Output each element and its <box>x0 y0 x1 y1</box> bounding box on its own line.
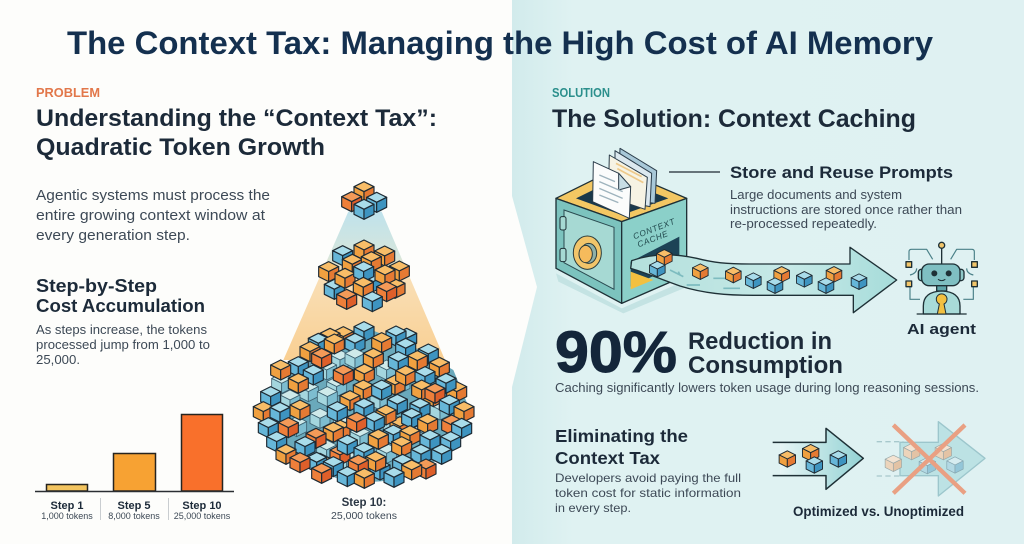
subheading description: 25,000. <box>36 353 80 367</box>
bar label: step 1 <box>41 500 93 521</box>
callout: store and reuse prompts: re-processed repeatedly. <box>730 217 877 231</box>
pile caption: 25,000 tokens <box>331 510 397 522</box>
safe left face <box>556 198 622 303</box>
subheading: step-by-step <box>36 275 205 316</box>
title: The Context Tax: Managing the High Cost of AI Memory <box>67 25 933 61</box>
subheading description: As steps increase, the tokens <box>36 323 207 337</box>
problem heading <box>36 105 437 161</box>
solution tag: SOLUTION <box>552 86 610 100</box>
bar chart <box>35 414 234 521</box>
flow cubes <box>650 250 867 293</box>
safe top <box>556 168 687 222</box>
cube group: step 5 <box>319 240 409 312</box>
problem tag: PROBLEM <box>36 85 100 100</box>
comparison: optimized vs unoptimized <box>773 422 985 496</box>
block: eliminating the context tax: token cost for static information <box>555 486 741 500</box>
panel: solution <box>552 86 985 519</box>
pile caption <box>331 497 397 522</box>
cube group: step 10 <box>253 322 474 488</box>
bar label: step 5: 8,000 tokens <box>108 511 160 521</box>
stat: 90% reduction: Consumption <box>688 352 843 379</box>
bar label: step 10 <box>174 500 231 521</box>
light cone <box>283 212 445 360</box>
flow small arrows <box>670 270 740 288</box>
safe shadow <box>556 273 692 313</box>
problem heading: Understanding the “Context Tax”: <box>36 105 437 132</box>
callout: store and reuse prompts: instructions are stored once rather than <box>730 203 962 217</box>
subheading: step-by-step: Step-by-Step <box>36 275 157 296</box>
callout line <box>669 171 720 173</box>
solution heading: The Solution: Context Caching <box>552 105 916 133</box>
pile caption: Step 10: <box>342 497 386 509</box>
bar label: step 1: Step 1 <box>50 500 84 512</box>
subheading: step-by-step: Cost Accumulation <box>36 295 205 316</box>
bar label: step 10: Step 10 <box>182 500 222 512</box>
icon: robot <box>906 242 977 314</box>
bar label: step 10: 25,000 tokens <box>174 511 231 521</box>
flow arrow <box>631 247 897 313</box>
bar label: step 5 <box>108 500 160 521</box>
callout: store and reuse prompts <box>730 163 962 231</box>
unoptimized arrow <box>877 422 985 496</box>
stat: 90% reduction: 90% <box>555 320 677 385</box>
bar label: step 1: 1,000 tokens <box>41 511 93 521</box>
safe label: CONTEXT <box>631 216 677 241</box>
agent label: AI agent <box>907 322 976 338</box>
block: eliminating the context tax <box>555 426 741 515</box>
problem description: Agentic systems must process the <box>36 187 270 204</box>
documents <box>593 148 657 218</box>
block: eliminating the context tax: in every step. <box>555 501 631 515</box>
stat: 90% reduction: Caching significantly lowers token usage during long reasoning sessions. <box>555 380 979 395</box>
illustration: context cache safe: CACHE <box>636 228 670 249</box>
panel: problem <box>35 85 474 522</box>
problem heading: Quadratic Token Growth <box>36 134 325 161</box>
problem description: every generation step. <box>36 227 190 244</box>
panel: solution background <box>512 0 1024 544</box>
block: eliminating the context tax: Context Tax <box>555 448 660 468</box>
safe dial <box>573 236 601 269</box>
safe right face <box>622 198 687 303</box>
illustration: context cache safe <box>556 148 977 314</box>
problem description <box>36 187 270 244</box>
token cube pyramid <box>253 182 474 488</box>
subheading description: processed jump from 1,000 to <box>36 338 210 352</box>
optimized arrow <box>773 428 863 489</box>
block: eliminating the context tax: Developers avoid paying the full <box>555 471 741 485</box>
subheading description <box>36 323 210 367</box>
problem description: entire growing context window at <box>36 207 266 224</box>
block: eliminating the context tax: Eliminating the <box>555 426 688 446</box>
pile backing <box>260 327 470 483</box>
cube group: step 1 <box>342 182 387 219</box>
stat: 90% reduction: Reduction in <box>688 328 832 355</box>
bar label: step 5: Step 5 <box>117 500 151 512</box>
callout: store and reuse prompts: Large documents and system <box>730 188 902 202</box>
stat: 90% reduction <box>555 320 979 395</box>
comparison caption: Optimized vs. Unoptimized <box>793 504 964 519</box>
callout: store and reuse prompts: Store and Reuse Prompts <box>730 163 953 182</box>
